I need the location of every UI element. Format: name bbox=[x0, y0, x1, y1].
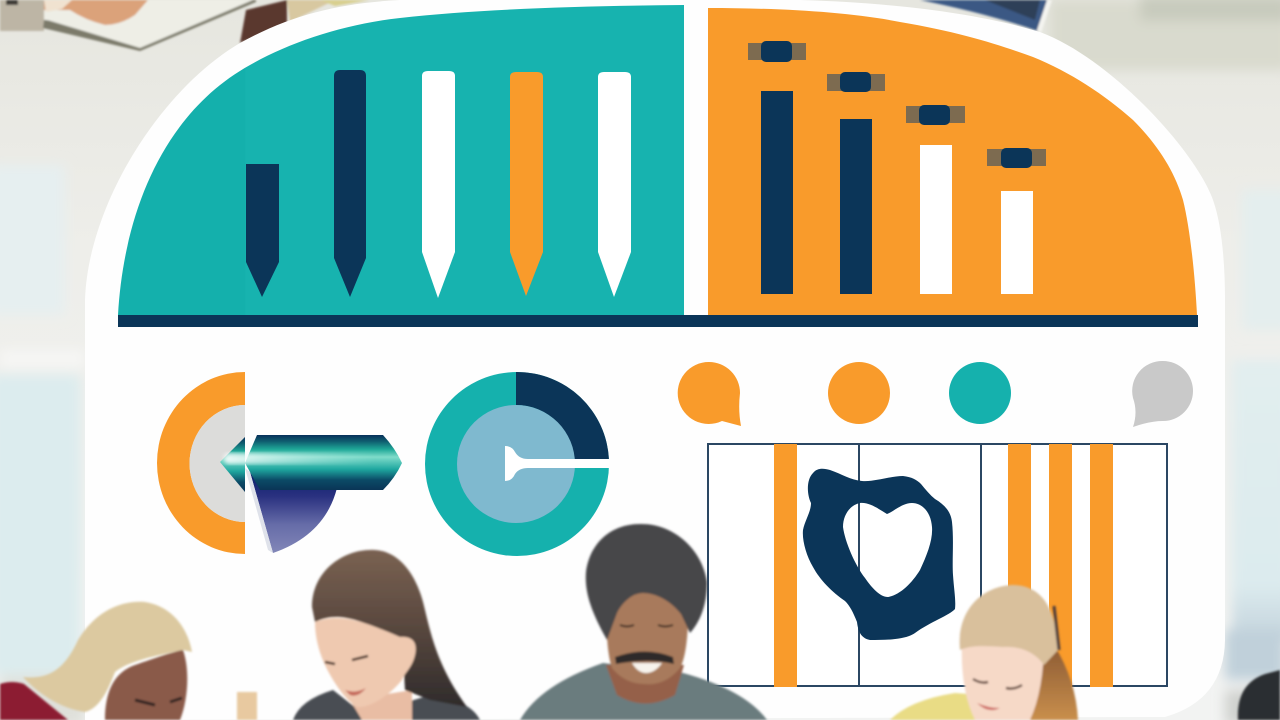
student 4 bbox=[890, 585, 1078, 720]
hair bbox=[586, 524, 707, 640]
face bbox=[315, 618, 416, 707]
hair bbox=[23, 602, 192, 712]
face bbox=[962, 640, 1044, 720]
orange speech bubble bbox=[678, 362, 741, 426]
pencil bar 5 bbox=[598, 72, 631, 297]
beam bbox=[245, 435, 402, 490]
student 1 bbox=[0, 602, 192, 720]
pencil bar 2 bbox=[334, 70, 366, 297]
pencil bar 1 bbox=[246, 164, 279, 297]
beam highlight bbox=[224, 453, 374, 464]
teal dot bbox=[949, 362, 1011, 424]
beam left arrow bbox=[220, 437, 245, 492]
capped bar chart bbox=[748, 41, 1046, 294]
cone shape bbox=[250, 472, 337, 553]
donut chart with pointer bbox=[425, 372, 609, 556]
orange columns bbox=[774, 444, 797, 687]
face bbox=[105, 650, 187, 720]
ponytail bbox=[1030, 645, 1078, 720]
navy divider bar bbox=[118, 315, 1198, 327]
panel: orange chart background bbox=[708, 8, 1197, 315]
hair bbox=[312, 550, 467, 707]
grey speech bubble bbox=[1132, 361, 1193, 427]
pointer bbox=[505, 446, 609, 481]
blurred box bbox=[237, 692, 257, 720]
hair bbox=[960, 585, 1058, 665]
half donut chart with beam bbox=[157, 372, 402, 554]
photo: students bbox=[0, 524, 1280, 720]
desk objects top left bbox=[0, 0, 1052, 51]
orange dot bbox=[828, 362, 890, 424]
moustache bbox=[615, 652, 674, 664]
bar 3 with cap bbox=[906, 105, 965, 294]
face bbox=[607, 585, 688, 684]
eyes bbox=[620, 625, 673, 626]
navy blob with heart bbox=[803, 469, 955, 640]
student 5 bbox=[1238, 670, 1280, 720]
bar 2 with cap bbox=[827, 72, 885, 294]
orange half ring bbox=[157, 372, 245, 554]
bar 4 with cap bbox=[987, 148, 1046, 294]
student 2 bbox=[293, 550, 480, 720]
panel: teal chart background bbox=[118, 5, 684, 315]
pencil bar 4 bbox=[510, 72, 543, 296]
student 3 bbox=[520, 524, 767, 720]
pencil bar chart bbox=[246, 70, 631, 298]
legend markers bbox=[678, 361, 1193, 427]
pencil bar 3 bbox=[422, 71, 455, 298]
bar 1 with cap bbox=[748, 41, 806, 294]
grey inner half ring bbox=[190, 405, 245, 522]
grid chart bbox=[708, 444, 1167, 687]
